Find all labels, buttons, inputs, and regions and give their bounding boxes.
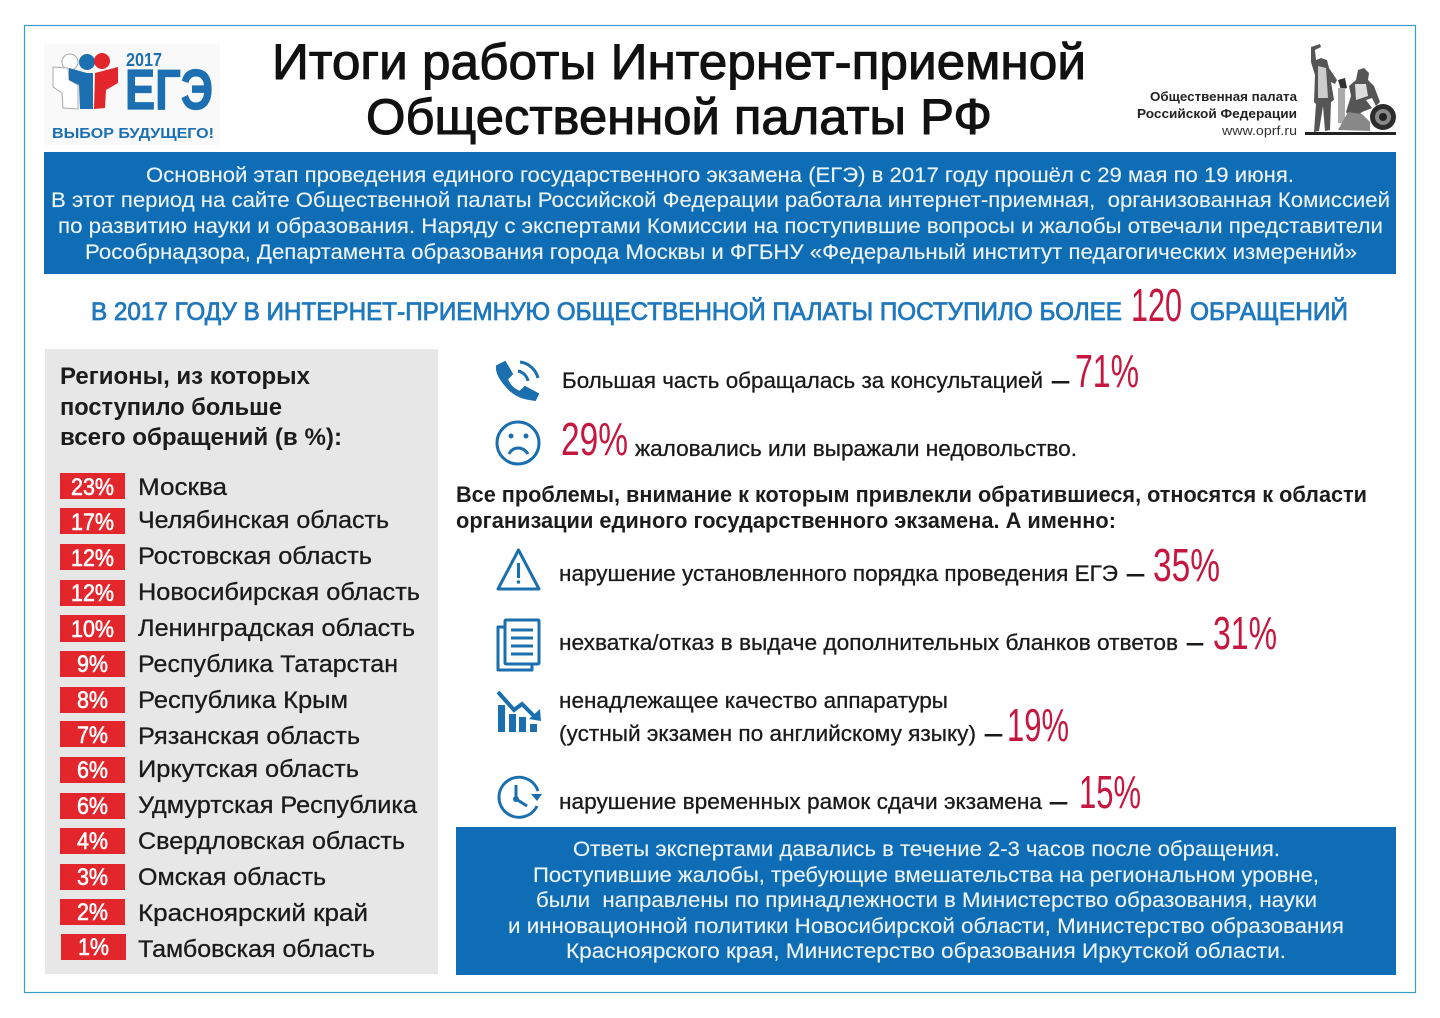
logo: Civic Chamber text [1137,89,1298,138]
row: Crimea: Республика Крым [138,687,348,714]
icon: documents [498,620,539,670]
row: Leningrad: Ленинградская область [138,615,415,642]
row: Sverdlovsk: Свердловская область [138,828,405,855]
row: Moscow: Москва [138,474,228,501]
icon: sad face [497,422,539,464]
stat: forms 31% [559,607,1277,659]
headline: 120 requests: В 2017 ГОДУ В ИНТЕРНЕТ-ПРИЕМНУЮ ОБЩЕСТВЕННОЙ ПАЛАТЫ ПОСТУПИЛО БОЛЕЕ [91,296,1122,326]
intro banner: по развитию науки и образования. Наряду с экспертами Комиссии на поступившие вопросы и жалобы отвечали представители [58,215,1383,238]
logo: EGE 2017 [44,44,220,145]
stat: complaints 29%: 29% [561,413,628,465]
row: Chelyabinsk: Челябинская область [138,507,389,534]
stat: complaints 29% [561,413,1077,465]
stat: procedure 35%: 35% [1153,539,1220,591]
stat: forms 31%: — [1187,630,1203,655]
row: Novosibirsk: 12% [71,580,114,607]
row: Novosibirsk: Новосибирская область [138,579,420,606]
row: Tambov [61,934,375,963]
stat: time 15%: нарушение временных рамок сдачи экзамена [559,789,1043,814]
stat: procedure 35% [559,539,1220,591]
intro banner: Рособрнадзора, Департамента образования города Москвы и ФГБНУ «Федеральный институт педагогических измерений» [85,241,1357,264]
icon: Minin and Pozharsky monument [1305,44,1396,135]
stat: equipment 19%: ненадлежащее качество аппаратуры [559,688,948,713]
logo: EGE 2017: ВЫБОР БУДУЩЕГО! [52,126,214,142]
stat: consultation 71% [562,345,1139,397]
response banner: Красноярского края, Министерство образования Иркутской области. [566,940,1286,963]
stat: equipment 19% [559,688,1069,751]
text block: problems intro [456,482,1367,533]
row: Irkutsk: Иркутская область [138,756,359,783]
row: Crimea: 8% [77,687,108,714]
title: Общественной палаты РФ [366,89,992,145]
row: Udmurtia: 6% [77,793,108,820]
panel: regions [45,349,438,974]
headline: 120 requests [91,279,1348,331]
row: Moscow [60,473,228,501]
row: Rostov [60,543,372,572]
row: Leningrad: 10% [71,616,114,643]
row: Krasnoyarsk [60,899,368,927]
row: Tatarstan: Республика Татарстан [138,651,398,678]
stat: forms 31%: 31% [1213,607,1277,659]
logo: Civic Chamber text: Российской Федерации [1137,106,1297,121]
response banner: были направлены по принадлежности в Министерство образования, науки [536,889,1317,912]
stat: consultation 71%: Большая часть обращалась за консультацией [562,368,1043,393]
row: Krasnoyarsk: Красноярский край [138,900,368,927]
row: Udmurtia: Удмуртская Республика [138,792,418,819]
logo: Civic Chamber text: Общественная палата [1150,89,1298,104]
stat: consultation 71%: — [1052,368,1069,393]
row: Omsk: 3% [77,864,108,891]
panel heading: всего обращений (в %): [60,424,342,451]
row: Moscow: 23% [71,474,114,501]
title [272,34,1086,145]
row: Tatarstan: 9% [77,651,108,678]
icon: falling chart [498,692,541,732]
title: Итоги работы Интернет-приемной [272,34,1086,90]
headline: 120 requests: ОБРАЩЕНИЙ [1190,296,1348,326]
stat: time 15% [559,766,1141,818]
row: Irkutsk [60,756,359,784]
row: Ryazan: Рязанская область [138,723,360,750]
row: Tambov: Тамбовская область [138,936,375,963]
row: Tambov: 1% [78,934,109,961]
response banner: Ответы экспертами давались в течение 2-3 часов после обращения. [573,838,1280,861]
stat: time 15%: 15% [1079,766,1141,818]
row: Crimea [60,687,348,714]
panel heading [60,363,342,451]
row: Chelyabinsk: 17% [71,509,114,536]
text block: problems intro: Все проблемы, внимание к которым привлекли обратившиеся, относятся к области [456,482,1367,507]
response banner: и инновационной политики Новосибирской области, Министерство образования [508,915,1344,938]
row: Krasnoyarsk: 2% [77,899,108,926]
stat: equipment 19%: (устный экзамен по английскому языку) [559,721,976,746]
row: Omsk [60,864,326,891]
intro banner: В этот период на сайте Общественной палаты Российской Федерации работала интернет-приемная, организованная Комиссией [51,189,1390,212]
stat: procedure 35%: нарушение установленного порядка проведения ЕГЭ [559,561,1118,586]
row: Sverdlovsk: 4% [77,828,108,855]
stat: consultation 71%: 71% [1075,345,1139,397]
row: Ryazan [60,721,360,750]
logo: EGE 2017: 2017 [126,50,162,70]
intro banner: Основной этап проведения единого государственного экзамена (ЕГЭ) в 2017 году прошёл с 29 мая по 19 июня. [146,164,1294,187]
response banner [456,827,1396,975]
response banner: Поступившие жалобы, требующие вмешательства на региональном уровне, [533,864,1319,887]
panel heading: поступило больше [60,394,282,421]
text block: problems intro: организации единого государственного экзамена. А именно: [456,508,1116,533]
stat: equipment 19%: — [985,721,1002,746]
icon: clock [499,777,542,817]
panel heading: Регионы, из которых [60,363,311,390]
row: Omsk: Омская область [138,864,326,891]
icon: warning triangle [498,550,539,589]
intro banner [44,152,1396,274]
stat: procedure 35%: — [1127,561,1144,586]
row: Rostov: Ростовская область [138,543,372,570]
stat: forms 31%: нехватка/отказ в выдаче дополнительных бланков ответов [559,630,1178,655]
row: Ryazan: 7% [77,722,108,749]
logo: EGE 2017: ЕГЭ [125,58,213,122]
row: Irkutsk: 6% [77,757,108,784]
row: Chelyabinsk [60,507,389,536]
stat: equipment 19%: 19% [1007,699,1069,751]
stat: complaints 29%: жаловались или выражали недовольство. [635,436,1077,461]
logo: Civic Chamber text: www.oprf.ru [1221,123,1297,138]
stat: time 15%: — [1050,789,1067,814]
icon: phone [497,362,538,400]
headline: 120 requests: 120 [1131,279,1182,331]
row: Rostov: 12% [71,545,114,572]
